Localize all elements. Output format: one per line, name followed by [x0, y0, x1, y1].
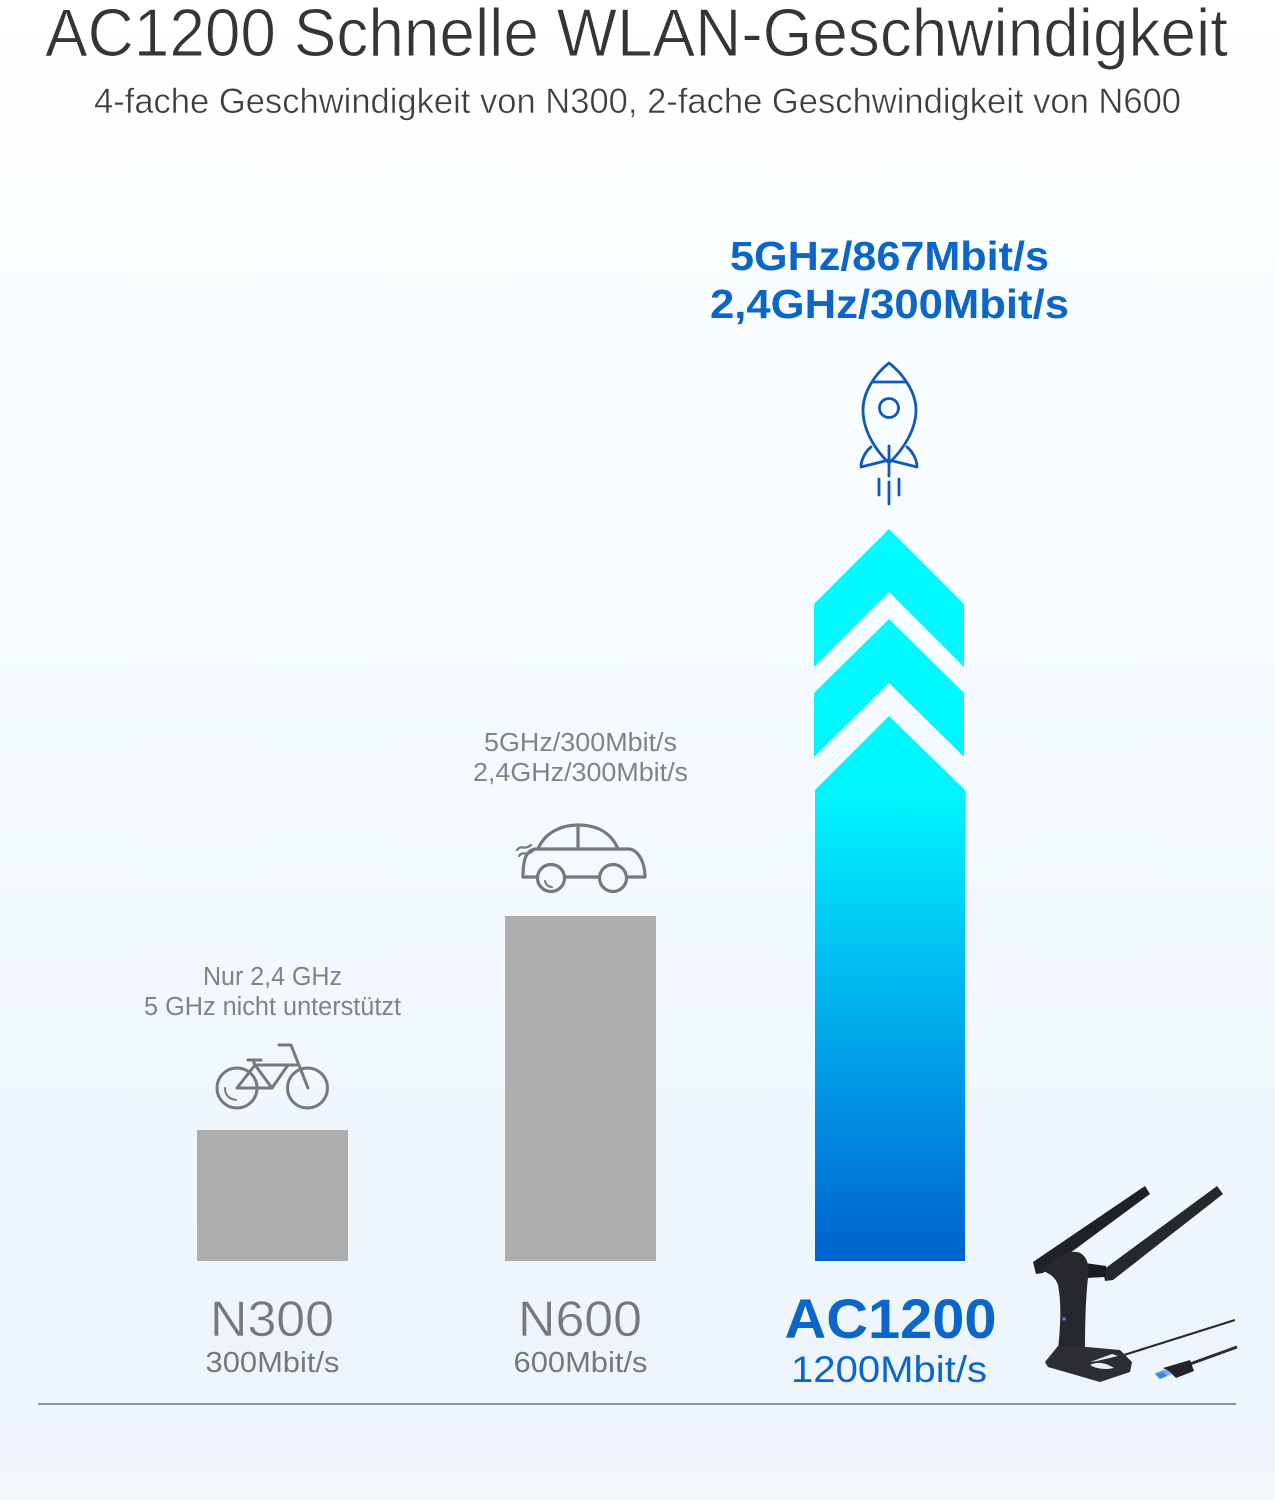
label: N600: N600 — [518, 1291, 642, 1347]
panel: AC1200 speed label — [710, 233, 1069, 327]
panel: N600 speed label: 2,4GHz/300Mbit/s — [473, 759, 688, 787]
panel: N300 speed label: Nur 2,4 GHz — [203, 963, 342, 991]
label: N300 — [206, 1291, 340, 1379]
label: AC1200: 1200Mbit/s — [791, 1349, 987, 1390]
label: N300: N300 — [210, 1291, 334, 1347]
label: N300: 300Mbit/s — [206, 1347, 340, 1379]
baseline — [38, 1403, 1236, 1405]
arrow: AC1200 speed bar — [814, 529, 965, 1261]
label: N600 — [514, 1291, 648, 1379]
label: AC1200: AC1200 — [784, 1287, 996, 1350]
subtitle: 4-fache Geschwindigkeit von N300, 2-fache Geschwindigkeit von N600 — [94, 82, 1181, 121]
label: AC1200 — [784, 1287, 996, 1390]
panel: N300 speed label: 5 GHz nicht unterstützt — [144, 993, 401, 1021]
panel: N600 speed label: 5GHz/300Mbit/s — [484, 729, 677, 757]
panel: N600 speed label — [473, 729, 688, 787]
panel: AC1200 speed label: 5GHz/867Mbit/s — [730, 233, 1049, 279]
icon: rocket — [861, 363, 917, 504]
bar: N300 — [197, 1130, 348, 1261]
icon: USB antenna adapter — [1033, 1186, 1237, 1382]
icon: car — [517, 825, 645, 892]
icon: bicycle — [217, 1045, 328, 1108]
label: N600: 600Mbit/s — [514, 1347, 648, 1379]
panel: AC1200 speed label: 2,4GHz/300Mbit/s — [710, 281, 1069, 327]
panel: N300 speed label — [144, 963, 401, 1021]
bar: N600 — [505, 916, 656, 1261]
